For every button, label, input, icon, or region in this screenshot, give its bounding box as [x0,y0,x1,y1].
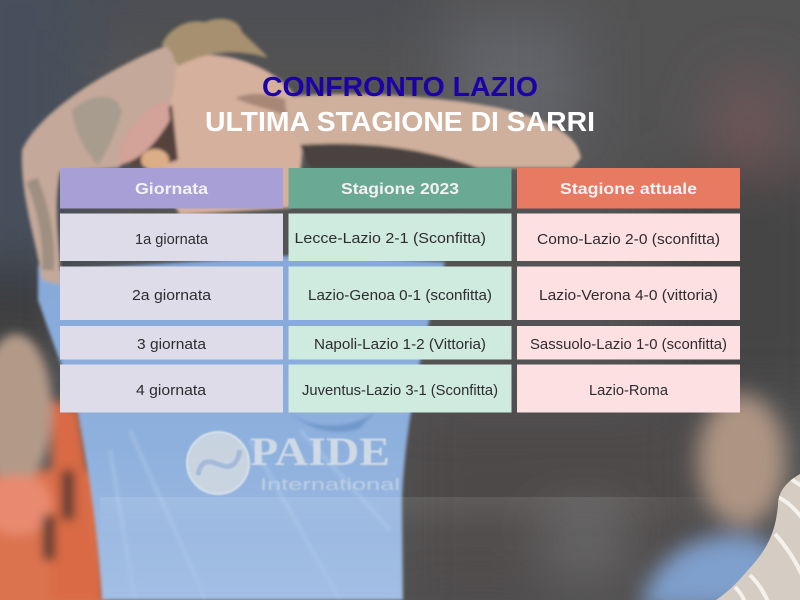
column header: Giornata [60,168,283,208]
comparison table [60,168,740,412]
row 4: Lazio-Roma [589,382,669,399]
hair [162,19,268,66]
column header: Stagione attuale: Stagione attuale [560,181,697,198]
raised left arm [22,46,175,285]
sponsor logo: International [260,475,400,494]
column header: Stagione 2023: Stagione 2023 [341,181,459,198]
player [22,19,581,600]
row 1: Lecce-Lazio 2-1 (Sconfitta) [294,230,486,247]
row 1 [60,214,740,261]
row 4 [60,364,740,412]
row 3: 3 giornata [137,336,207,353]
row 1: Como-Lazio 2-0 (sconfitta) [537,231,720,248]
row 2: 2a giornata [132,287,212,304]
row 2 [60,266,740,320]
background figure left [0,334,105,600]
row 1: 1a giornata [135,231,209,248]
title line 2: ULTIMA STAGIONE DI SARRI [205,106,595,137]
row 4: 4 giornata [136,382,207,399]
ear [141,149,169,171]
sponsor logo [187,429,400,494]
row 3 [60,326,740,360]
sponsor logo: PAIDE [250,429,390,474]
raised right arm [285,94,581,168]
jersey [38,255,445,600]
column header: Stagione 2023 [288,168,512,208]
lower light band [100,497,676,524]
row 4: Juventus-Lazio 3-1 (Sconfitta) [302,382,498,399]
column header: Stagione attuale [517,168,740,208]
row 3: Sassuolo-Lazio 1-0 (sconfitta) [530,336,727,353]
neck and head [160,55,302,215]
decorative corner blob [716,474,800,600]
title line 1: CONFRONTO LAZIO [262,71,538,102]
background figure right [640,394,800,600]
row 2: Lazio-Verona 4-0 (vittoria) [539,287,718,304]
row 2: Lazio-Genoa 0-1 (sconfitta) [308,287,492,304]
row 3: Napoli-Lazio 1-2 (Vittoria) [314,336,486,353]
column header: Giornata: Giornata [135,181,208,198]
